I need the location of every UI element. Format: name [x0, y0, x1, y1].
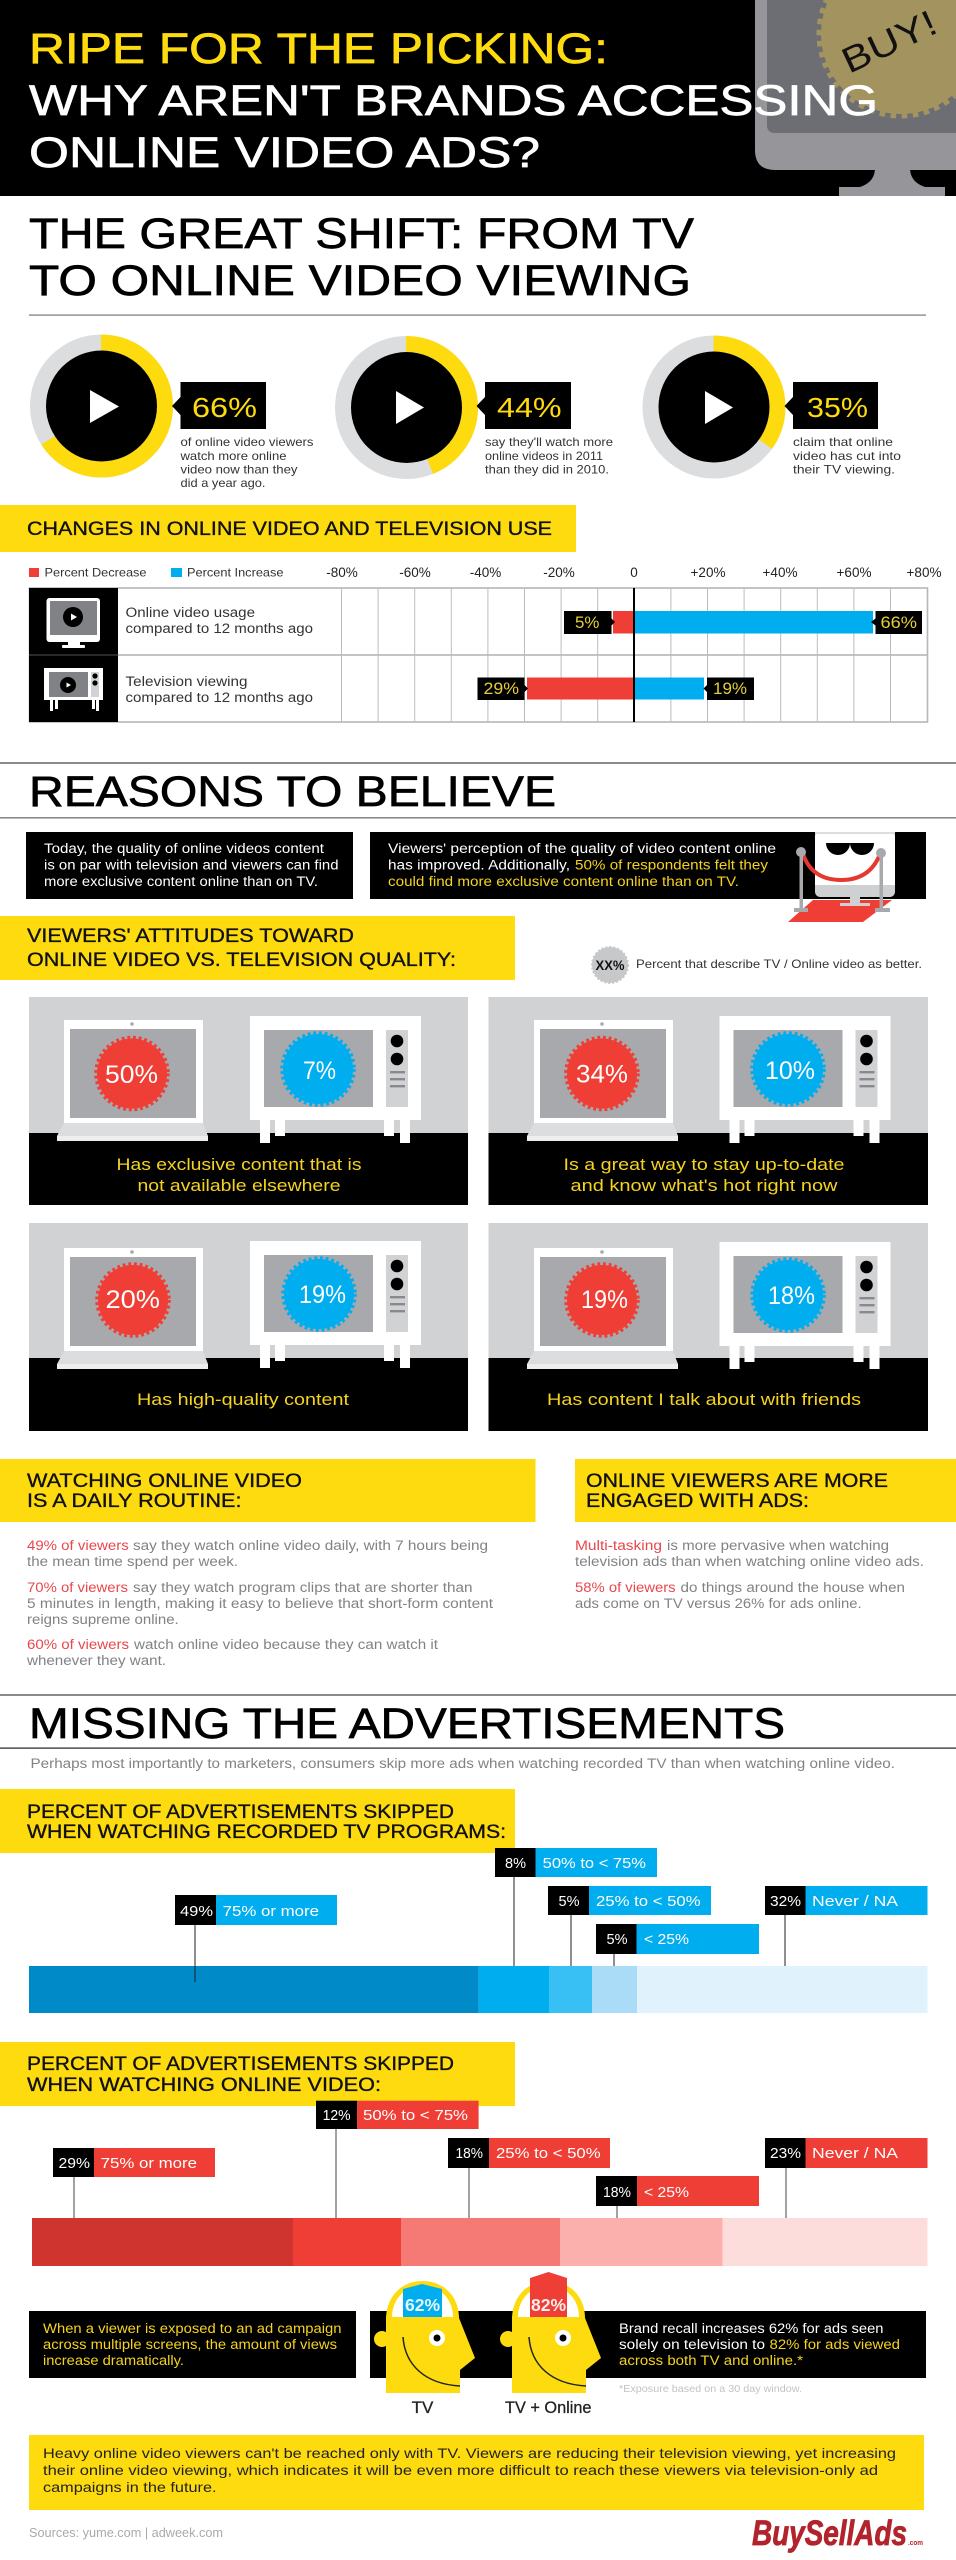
heading band: skipped on online video: WHEN WATCHING ONLINE VIDEO:: [27, 2075, 381, 2096]
label: 29% 75% or more: 29%: [58, 2155, 90, 2172]
burst: 10%: [752, 1034, 824, 1104]
caption: Has exclusive content that is: [116, 1155, 362, 1174]
text box: perception improved: has improved. Additionally,: [388, 858, 570, 872]
burst: 19%: 19%: [299, 1281, 346, 1309]
legend: percent that describe as better: Percent that describe TV / Online video as better.: [636, 957, 922, 971]
icon: laptop: [57, 1248, 208, 1369]
legend: percent that describe as better: [592, 947, 922, 983]
text: 35% description: their TV viewing.: [793, 462, 895, 476]
label: 18% less than 25%: 18%: [603, 2184, 631, 2201]
label: 49% 75% or more: [175, 1895, 337, 1982]
burst: 18%: [752, 1260, 824, 1330]
text block: engaged with ads facts: [575, 1538, 924, 1611]
heading band: changes in online video and television use: CHANGES IN ONLINE VIDEO AND TELEVISION USE: [27, 519, 552, 540]
footnote: *Exposure based on a 30 day window.: [619, 2383, 802, 2395]
burst: 18%: 18%: [768, 1282, 815, 1310]
text block: daily routine facts: the mean time spend per week.: [27, 1554, 238, 1569]
label: 49% 75% or more: 49%: [180, 1903, 213, 1920]
label: 18% less than 25%: < 25%: [644, 2184, 689, 2201]
label: 32% never / NA: Never / NA: [812, 1893, 898, 1910]
label: 18% 25% to less than 50%: 18%: [456, 2145, 483, 2162]
label: 66%: 66%: [880, 613, 917, 632]
title: WHY AREN'T BRANDS ACCESSING: [29, 77, 878, 125]
panel: content I talk about: [488, 1223, 928, 1431]
heading band: viewers' attitudes: VIEWERS' ATTITUDES TOWARD: [27, 926, 354, 947]
burst: 20%: 20%: [106, 1286, 160, 1314]
header banner: [0, 0, 956, 196]
stat: 35%: [650, 344, 901, 476]
label: 29% 75% or more: 75% or more: [101, 2155, 197, 2172]
chart axis labels: -40%: [470, 565, 501, 580]
label: 32% never / NA: [765, 1886, 928, 1966]
label: 5% 25% to less than 50%: 5%: [558, 1893, 580, 1910]
caption: [564, 1155, 844, 1195]
text block: daily routine facts: say they watch online video daily, with 7 hours being: [133, 1538, 488, 1553]
legend: percent that describe as better: XX%: [596, 958, 624, 973]
caption: Has high-quality content: [137, 1390, 349, 1409]
row: television viewing: compared to 12 months ago: [126, 690, 313, 705]
label: 29%: 29%: [484, 679, 519, 698]
icon: television: [250, 1241, 421, 1368]
icon: laptop: [527, 1020, 678, 1141]
burst: 34%: [566, 1038, 638, 1109]
text box: perception improved: [370, 832, 926, 899]
label: 12% 50% to less than 75%: 12%: [323, 2107, 351, 2124]
title: [29, 25, 878, 177]
callout: 44%: [476, 382, 571, 429]
text: 66% description: [179, 435, 314, 490]
conclusion box: Heavy online video viewers can't be reached only with TV. Viewers are reducing their television viewing, yet increasing: [43, 2445, 896, 2461]
heading band: daily routine: WATCHING ONLINE VIDEO: [27, 1471, 302, 1492]
row: television viewing: [126, 674, 754, 705]
label: 5%: 5%: [575, 613, 599, 632]
chart axis labels: [326, 565, 941, 580]
text box: brand recall: 82% for ads viewed: [770, 2337, 900, 2352]
label: 23% never / NA: Never / NA: [812, 2145, 898, 2162]
label: 5% less than 25%: 5%: [606, 1931, 628, 1948]
label: 5% 25% to less than 50%: 25% to < 50%: [596, 1893, 701, 1910]
label: 23% never / NA: [765, 2138, 928, 2218]
caption: Is a great way to stay up-to-date: [564, 1155, 844, 1174]
icon: head with 62% recall: [374, 2281, 475, 2393]
icon: television: [720, 1242, 890, 1369]
text box: quality on par: more exclusive content online than on TV.: [44, 874, 318, 889]
callout: 35%: 35%: [807, 392, 868, 423]
chart axis labels: +60%: [837, 565, 871, 580]
label: TV: TV: [412, 2398, 434, 2417]
text block: daily routine facts: reigns supreme online.: [27, 1612, 179, 1627]
text block: daily routine facts: whenever they want.: [26, 1653, 166, 1668]
bar: 5% decrease: [613, 611, 634, 634]
stat: 66%: [38, 342, 314, 490]
stat: 44%: [343, 344, 613, 476]
label: 8% 50% to less than 75%: 8%: [505, 1855, 526, 1872]
icon: head with 82% recall: [500, 2272, 601, 2393]
label: 19%: [704, 678, 754, 700]
row: online video usage: [126, 605, 922, 636]
text block: engaged with ads facts: ads come on TV versus 26% for ads online.: [575, 1596, 862, 1611]
sources: Sources: yume.com | adweek.com: [29, 2525, 223, 2540]
icon: head with 62% recall: 62%: [405, 2295, 440, 2315]
chart legend: Percent Increase: [187, 566, 284, 580]
text: 35% description: claim that online: [793, 435, 893, 449]
row: online video usage: Online video usage: [126, 605, 255, 620]
text box: brand recall: solely on television to: [619, 2337, 765, 2352]
label: 19%: 19%: [713, 679, 747, 698]
burst: 20%: [98, 1264, 168, 1336]
label: 18% 25% to less than 50%: 25% to < 50%: [496, 2145, 601, 2162]
burst: 7%: 7%: [303, 1057, 336, 1085]
callout: 44%: 44%: [497, 392, 562, 423]
text: 44% description: online videos in 2011: [485, 449, 603, 463]
text box: brand recall: Brand recall increases 62% for ads seen: [619, 2321, 884, 2336]
label: 5%: [564, 611, 615, 634]
heading band: engaged with ads: ONLINE VIEWERS ARE MORE: [586, 1471, 888, 1492]
label: 5% 25% to less than 50%: [548, 1886, 711, 1966]
label: 5% less than 25%: [596, 1924, 759, 1966]
chart axis labels: 0: [630, 565, 638, 580]
burst: 50%: [96, 1038, 168, 1109]
icon: television: [44, 668, 103, 711]
text box: quality on par: [26, 832, 353, 899]
label: 49% 75% or more: 75% or more: [223, 1903, 319, 1920]
donut: 66 percent: [38, 342, 165, 470]
label: 66%: [871, 611, 922, 634]
text box: multiple screens: [29, 2311, 356, 2378]
label: 18% 25% to less than 50%: [448, 2138, 610, 2218]
label: 18% less than 25%: [596, 2176, 759, 2218]
heading band: skipped on online video: [0, 2042, 515, 2106]
panel: exclusive content: [29, 997, 468, 1205]
heading: the great shift: THE GREAT SHIFT: FROM TV: [29, 210, 694, 258]
heading band: daily routine: [0, 1459, 536, 1522]
icon: head with 82% recall: 82%: [531, 2295, 566, 2315]
text box: perception improved: Viewers' perception of the quality of video content online: [388, 841, 776, 856]
chart axis labels: -80%: [326, 565, 358, 580]
label: 32% never / NA: 32%: [770, 1893, 801, 1910]
label: 5% less than 25%: < 25%: [644, 1931, 689, 1948]
text box: brand recall: across both TV and online.*: [619, 2353, 804, 2368]
stacked bar: online video: [32, 2218, 928, 2266]
text block: engaged with ads facts: television ads than when watching online video ads.: [575, 1554, 924, 1569]
caption: and know what's hot right now: [570, 1176, 838, 1195]
heading band: viewers' attitudes: [0, 916, 515, 980]
chart axis labels: -60%: [399, 565, 431, 580]
chart axis labels: +40%: [763, 565, 797, 580]
heading band: skipped on recorded TV: WHEN WATCHING RECORDED TV PROGRAMS:: [27, 1822, 506, 1843]
label: 12% 50% to less than 75%: [316, 2101, 479, 2218]
caption: Has content I talk about with friends: [547, 1390, 861, 1409]
label: 29%: [478, 678, 528, 700]
conclusion box: campaigns in the future.: [43, 2479, 216, 2495]
bar chart: changes in use: [29, 588, 928, 722]
bar: 19% increase: [634, 678, 704, 700]
heading band: skipped on recorded TV: PERCENT OF ADVERTISEMENTS SKIPPED: [27, 1802, 454, 1823]
caption: not available elsewhere: [138, 1176, 340, 1195]
donut: 44 percent: [343, 344, 470, 471]
icon: monitor with BUY! starburst: [755, 0, 956, 196]
icon: monitor with BUY! starburst: BUY!: [835, 2, 943, 81]
burst: 19%: [566, 1264, 638, 1336]
text block: engaged with ads facts: is more pervasive when watching: [667, 1538, 889, 1553]
text block: engaged with ads facts: Multi-tasking: [575, 1538, 662, 1553]
text box: brand recall: [370, 2311, 926, 2378]
icon: monitor: [46, 598, 100, 648]
text block: daily routine facts: say they watch program clips that are shorter than: [133, 1580, 472, 1595]
text: 35% description: video has cut into: [793, 449, 901, 463]
burst: 7%: [282, 1034, 354, 1104]
heading: missing the advertisements: MISSING THE ADVERTISEMENTS: [29, 1700, 785, 1748]
heading: the great shift: [29, 210, 694, 305]
stacked bar: recorded TV: [29, 1966, 928, 2013]
text box: multiple screens: increase dramatically.: [43, 2353, 184, 2368]
heading band: daily routine: IS A DAILY ROUTINE:: [27, 1491, 242, 1512]
text block: daily routine facts: [26, 1538, 493, 1668]
burst: 34%: 34%: [576, 1060, 628, 1088]
text block: daily routine facts: watch online video because they can watch it: [133, 1637, 438, 1652]
text: 44% description: say they'll watch more: [485, 435, 613, 449]
icon: television: [250, 1016, 421, 1143]
donut: 35 percent: [650, 344, 778, 470]
heading band: engaged with ads: [575, 1459, 956, 1522]
text block: daily routine facts: 70% of viewers: [27, 1580, 128, 1595]
label: 29% 75% or more: [53, 2148, 215, 2218]
heading: the great shift: TO ONLINE VIDEO VIEWING: [29, 257, 691, 305]
text: 66% description: of online video viewers: [180, 435, 314, 449]
text box: perception improved: 50% of respondents felt they: [575, 858, 768, 872]
text: 35% description: [793, 435, 901, 476]
text: 44% description: [485, 435, 613, 476]
bar: 29% decrease: [527, 678, 634, 700]
panel: high-quality content: [29, 1223, 468, 1431]
label: TV + Online: TV + Online: [505, 2398, 592, 2417]
label: 8% 50% to less than 75%: 50% to < 75%: [543, 1855, 646, 1872]
text box: quality on par: Today, the quality of online videos content: [44, 841, 324, 856]
row: television viewing: Television viewing: [126, 674, 248, 689]
heading band: engaged with ads: ENGAGED WITH ADS:: [586, 1491, 809, 1512]
text box: quality on par: is on par with television and viewers can find: [44, 858, 338, 872]
icon: laptop: [527, 1248, 678, 1369]
heading band: skipped on online video: PERCENT OF ADVERTISEMENTS SKIPPED: [27, 2054, 454, 2075]
icon: laptop: [57, 1020, 208, 1141]
heading: reasons to believe: REASONS TO BELIEVE: [29, 768, 556, 816]
burst: 19%: 19%: [581, 1286, 628, 1314]
label: 8% 50% to less than 75%: [495, 1848, 657, 1966]
chart axis labels: +80%: [907, 565, 941, 580]
title: RIPE FOR THE PICKING:: [29, 25, 608, 73]
panel: stay up-to-date: [488, 997, 928, 1205]
icon: monitor with sunglasses on red carpet: [788, 830, 895, 922]
text box: perception improved: could find more exclusive content online than on TV.: [388, 874, 739, 889]
burst: 10%: 10%: [765, 1057, 815, 1085]
text block: daily routine facts: 5 minutes in length, making it easy to believe that short-form content: [27, 1596, 493, 1611]
label: 23% never / NA: 23%: [770, 2145, 801, 2162]
text block: daily routine facts: 49% of viewers: [27, 1538, 129, 1553]
callout: 35%: [784, 382, 878, 429]
text: 66% description: video now than they: [180, 462, 298, 476]
chart legend: [29, 566, 284, 580]
text: intro sentence: Perhaps most importantly to marketers, consumers skip more ads when watching recorded TV than when watching online video.: [30, 1756, 895, 1771]
burst: 19%: [284, 1258, 354, 1330]
text block: daily routine facts: 60% of viewers: [27, 1637, 129, 1652]
chart axis labels: -20%: [543, 565, 575, 580]
callout: 66%: 66%: [192, 392, 257, 423]
chart axis labels: +20%: [691, 565, 725, 580]
text: 44% description: than they did in 2010.: [485, 462, 609, 476]
text box: multiple screens: When a viewer is exposed to an ad campaign: [43, 2321, 342, 2336]
logo: BuySellAds: BuySellAds: [752, 2514, 907, 2553]
text: 66% description: did a year ago.: [180, 476, 266, 490]
heading band: viewers' attitudes: ONLINE VIDEO VS. TELEVISION QUALITY:: [27, 950, 456, 971]
heading band: changes in online video and television use: [0, 505, 576, 552]
title: ONLINE VIDEO ADS?: [29, 129, 540, 177]
icon: television: [720, 1016, 890, 1143]
text: 66% description: watch more online: [179, 449, 287, 463]
bar: 66% increase: [634, 611, 873, 634]
chart legend: Percent Decrease: [44, 566, 147, 580]
burst: 50%: 50%: [105, 1061, 158, 1089]
text block: engaged with ads facts: 58% of viewers: [575, 1580, 676, 1595]
logo: BuySellAds: .com: [908, 2540, 923, 2547]
callout: 66%: [172, 382, 266, 429]
caption: [116, 1155, 362, 1195]
text block: engaged with ads facts: do things around the house when: [680, 1580, 905, 1595]
row: online video usage: compared to 12 months ago: [126, 621, 313, 636]
heading band: skipped on recorded TV: [0, 1789, 515, 1853]
conclusion box: their online video viewing, which indicates it will be even more difficult to reach these viewers via television-only ad: [43, 2462, 878, 2478]
label: 12% 50% to less than 75%: 50% to < 75%: [363, 2107, 468, 2124]
conclusion box: [29, 2435, 924, 2510]
text box: multiple screens: across multiple screens, the amount of views: [43, 2337, 337, 2352]
